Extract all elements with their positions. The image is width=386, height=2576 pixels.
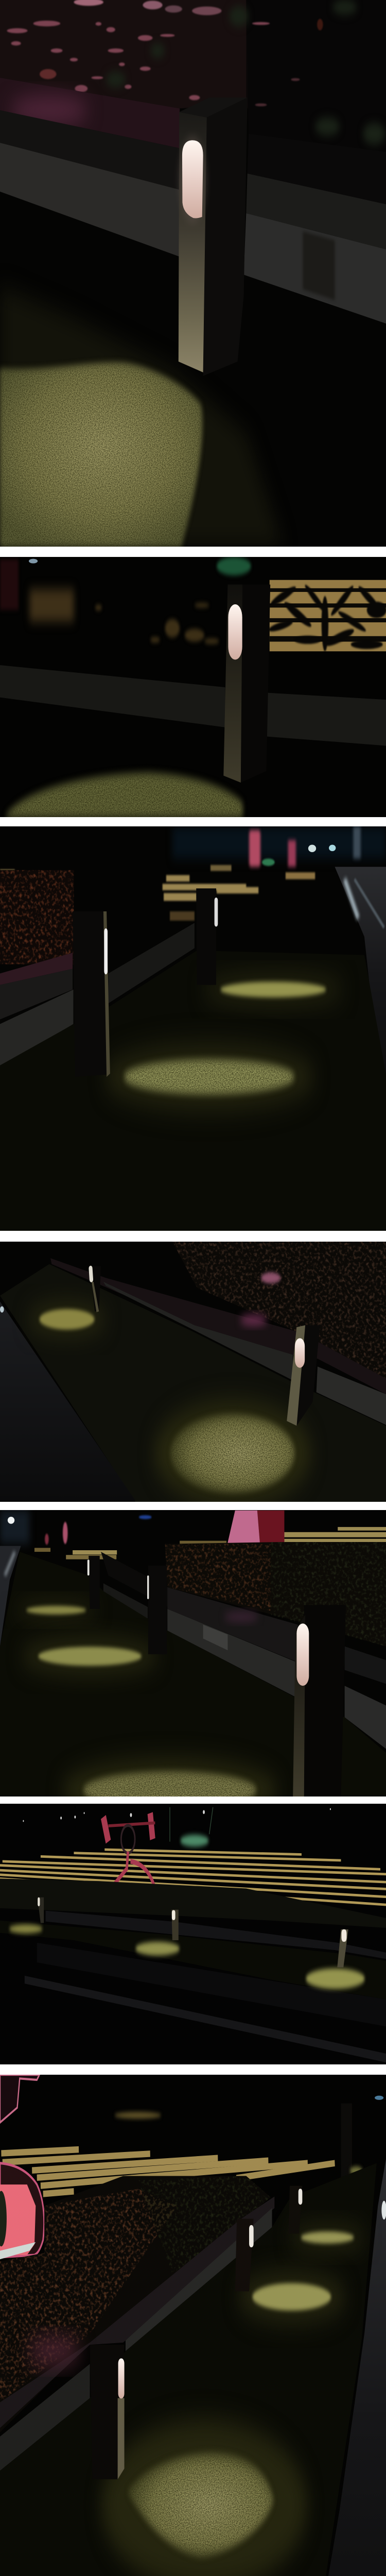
walkway: [311, 2159, 386, 2576]
garden bushes: [0, 2176, 271, 2432]
pools of light on grass: [14, 1601, 278, 1822]
panel: photo 6, wide view with sculpture and step lights: [0, 1804, 386, 2064]
walkway: [0, 1301, 135, 1501]
reddish bushes: [0, 870, 74, 985]
distant neon and street lights: [249, 826, 361, 867]
panel: photo 5, row of bollards from street side: [0, 1510, 386, 1797]
sculpture: [226, 1511, 284, 1571]
pool of light on grass: [0, 363, 202, 547]
bollard lamp near: [73, 911, 110, 1077]
bollard lamp: [179, 97, 248, 376]
pools of light on grass: [28, 1301, 311, 1506]
pool of light on grass: [5, 773, 242, 817]
dim grass around pool of light: [0, 285, 283, 547]
warm step lines: [0, 1850, 386, 1905]
dark bushes: [0, 1878, 386, 1928]
lawn: [0, 1552, 386, 1797]
panel: photo 2, bollard front view with warm light stripes: [0, 557, 386, 817]
warm step strips: [1, 2149, 335, 2194]
kerb with pink glow: [50, 1258, 386, 1425]
bollard lamp: [223, 585, 270, 783]
lawn: [0, 951, 386, 1231]
middle bollard: [147, 1566, 167, 1654]
warm step strips: [34, 1527, 386, 1560]
pools of light on grass: [9, 1924, 365, 1989]
road with wet reflections: [335, 867, 386, 1084]
bushes: [101, 1542, 386, 1647]
pools of light on grass: [103, 975, 345, 1109]
lawn: [0, 2163, 377, 2576]
pools of light on grass: [101, 2224, 367, 2576]
walkway strip: [25, 1976, 386, 2062]
stone kerb: [0, 665, 386, 745]
street lights and road: [0, 1510, 152, 1647]
lawn: [0, 1264, 386, 1502]
pink sculpture: [0, 2075, 44, 2259]
far bollard: [289, 2186, 302, 2233]
middle bollard: [235, 2218, 254, 2291]
far bollard: [89, 1265, 101, 1312]
panel: photo 1, lit bollard close-up on grass: [0, 0, 386, 547]
panel: photo 4, bollards with circular light pools: [0, 1242, 386, 1502]
bushes with pink leaves: [0, 0, 386, 152]
distant lights and green tree: [23, 1807, 331, 1846]
background warm steps behind leaves: [0, 557, 386, 651]
bollard lamp far: [196, 888, 218, 985]
near bollard: [287, 1325, 320, 1426]
bushes: [172, 1242, 386, 1379]
warm step strips: [0, 865, 315, 921]
kerb top with pink glow: [0, 78, 180, 148]
bollards: [38, 1897, 348, 1968]
sculpture and step strips: [226, 1242, 386, 1278]
kerb with pink glow: [0, 2196, 274, 2471]
panel: photo 7, curved garden path with bollards: [0, 2075, 386, 2576]
sculpture: [103, 1813, 155, 1889]
near bollard: [90, 2345, 125, 2479]
stone kerb wall: [0, 110, 386, 324]
lawn: [0, 1921, 386, 1999]
stone kerb: [103, 1583, 386, 1749]
kerb: [45, 1911, 386, 1959]
panel: photo 3, two bollards along lawn at dusk: [0, 826, 386, 1231]
near bollard: [293, 1605, 346, 1797]
far bollard: [87, 1556, 100, 1609]
faint far strip and post: [114, 2096, 383, 2208]
stone kerb: [0, 923, 195, 1067]
